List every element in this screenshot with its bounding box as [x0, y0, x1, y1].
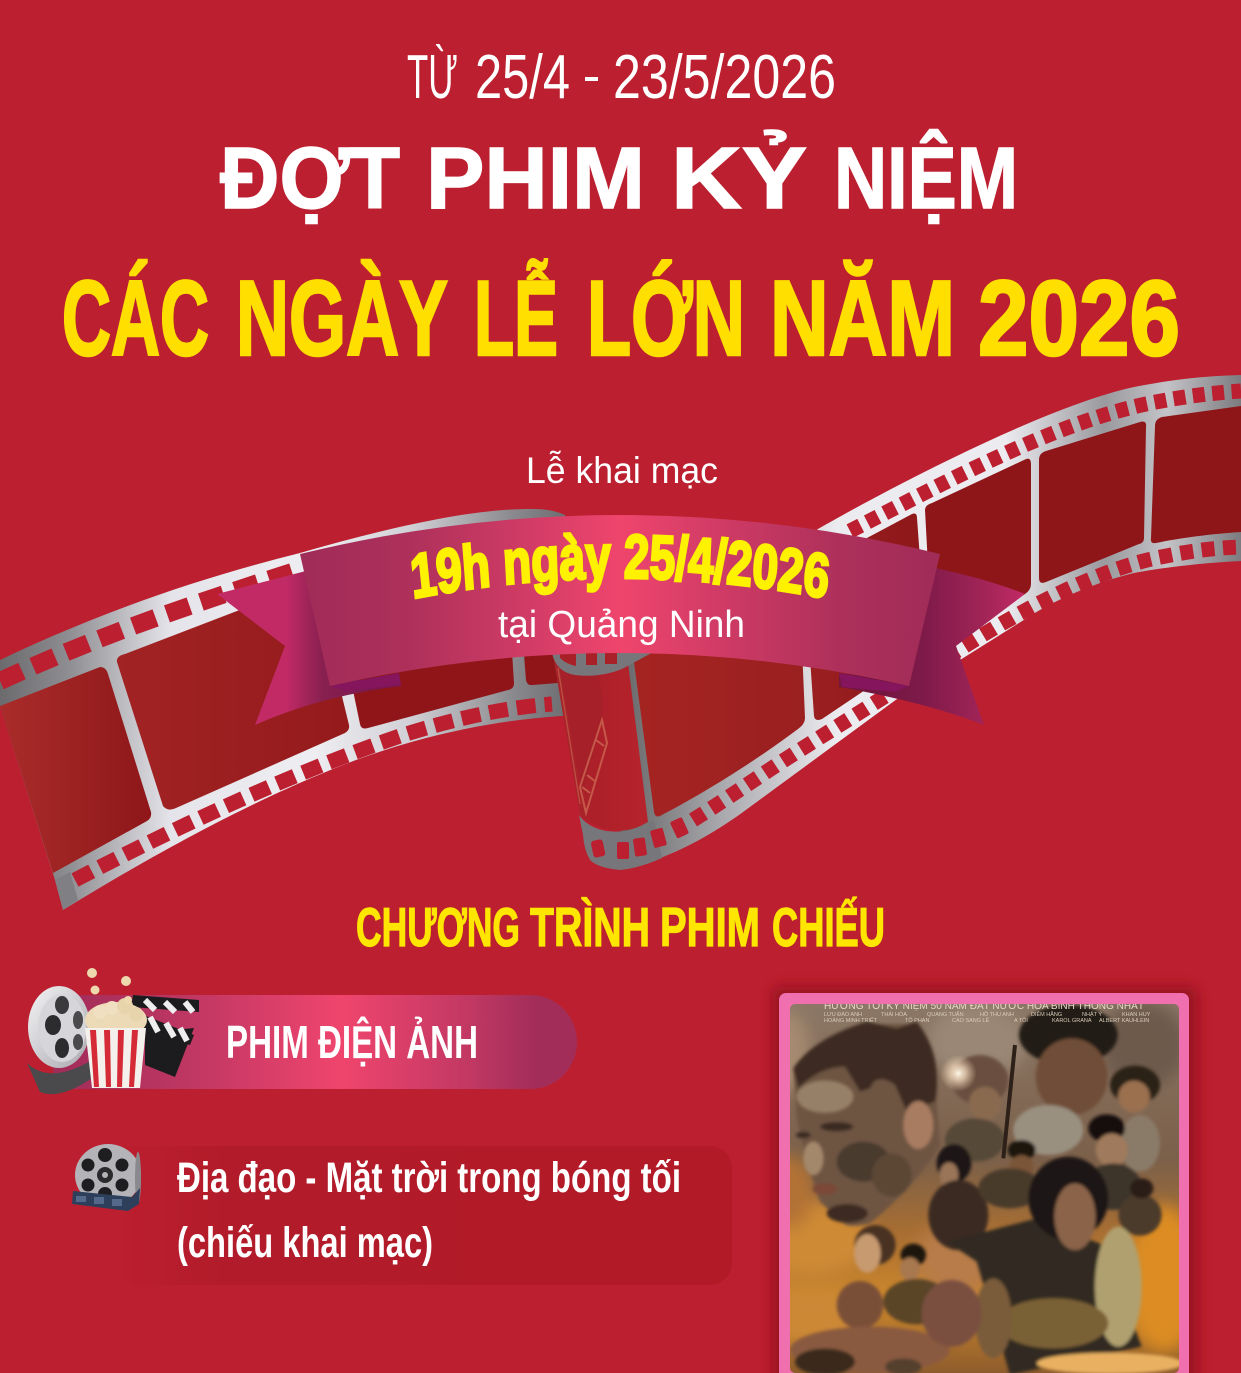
poster cast names: NHẬT Ý	[1082, 1011, 1102, 1018]
icon: film tail	[27, 1060, 92, 1094]
poster cast names: TÔ PHAN	[905, 1017, 929, 1024]
title: date range	[407, 43, 836, 112]
title: yellow heading: CÁC	[62, 258, 209, 378]
poster cast names: ALBERT KAUHLEIN	[1099, 1018, 1149, 1024]
poster cast names: DIỄM HẰNG	[1031, 1010, 1062, 1018]
title: yellow heading: LỚN	[587, 258, 745, 378]
poster cast names: LƯU ĐÀO ANH	[824, 1011, 862, 1018]
poster cast names: HOÀNG MINH TRIẾT	[824, 1017, 878, 1024]
ribbon banner	[217, 515, 1025, 725]
icon: popcorn bucket	[85, 1028, 146, 1088]
section heading: film programme	[356, 896, 885, 958]
opening ceremony label: Lễ khai mạc	[526, 450, 718, 491]
section heading: film programme: TRÌNH	[530, 896, 650, 958]
curl: inner fold	[560, 668, 602, 795]
opening venue: tại Quảng Ninh	[498, 604, 745, 646]
poster cast names: A TÔI	[1014, 1017, 1028, 1024]
title: yellow heading: 2026	[978, 258, 1180, 378]
icon: cinema reel, popcorn and clapperboard	[27, 968, 199, 1094]
title: yellow heading: NĂM	[770, 258, 955, 378]
title: date range: 23/5/2026	[613, 43, 836, 112]
film title: Địa đạo - Mặt trời trong bóng tối	[177, 1154, 681, 1202]
poster cast names	[824, 1011, 1150, 1022]
title: yellow heading	[62, 258, 1180, 378]
title: date range: 25/4	[475, 43, 570, 112]
poster cast names: THÁI HÒA	[881, 1011, 907, 1018]
poster shadow	[773, 987, 1197, 1373]
film strip: central curl	[552, 650, 689, 870]
title: main heading	[220, 129, 1018, 227]
film strip illustration	[0, 375, 1241, 910]
film strip: right section	[620, 375, 1241, 870]
pill background	[53, 995, 577, 1089]
poster cast names: KHAN HUY	[1122, 1012, 1151, 1018]
section heading: film programme: CHIẾU	[772, 896, 885, 958]
icon: popcorn	[85, 968, 147, 1038]
title: main heading: KỶ	[671, 129, 807, 227]
title: date range: TỪ	[407, 43, 458, 112]
section heading: film programme: PHIM	[660, 896, 760, 958]
poster cast names: QUANG TUẤN	[927, 1011, 964, 1018]
film note: (chiếu khai mạc)	[177, 1219, 433, 1267]
curl: body	[553, 655, 648, 831]
pill label: PHIM ĐIỆN ẢNH	[226, 1016, 478, 1068]
icon: small film reel	[72, 1144, 141, 1211]
title: yellow heading: LỄ	[474, 258, 558, 378]
opening date: 19h ngày 25/4/2026	[411, 532, 830, 600]
row background	[34, 1146, 732, 1285]
icon: film reel	[28, 986, 90, 1068]
poster cast names: KAROL GRANA	[1052, 1018, 1092, 1024]
curl: diamond pattern	[580, 720, 607, 813]
ribbon: left tail	[217, 560, 401, 725]
poster artwork	[790, 1004, 1179, 1373]
poster cast names: HỒ THU ANH	[980, 1011, 1014, 1018]
film strip: left section	[0, 509, 570, 910]
poster cast names: CAO SANG LÊ	[952, 1016, 990, 1024]
section heading: film programme: CHƯƠNG	[356, 896, 520, 958]
title: main heading: ĐỢT	[220, 130, 400, 227]
title: yellow heading: NGÀY	[236, 258, 448, 378]
title: main heading: NIỆM	[834, 130, 1018, 227]
category pill: feature films	[53, 995, 577, 1089]
ribbon: main band	[300, 515, 940, 686]
ribbon: right tail	[839, 566, 1025, 725]
film poster	[747, 987, 1200, 1373]
title: main heading: PHIM	[426, 130, 645, 227]
curl: bottom rim	[579, 815, 662, 870]
ribbon: fold shadows	[330, 673, 909, 692]
film list row	[34, 1144, 732, 1285]
poster tagline: HƯỚNG TỚI KỶ NIỆM 50 NĂM ĐẤT NƯỚC HÒA BÌNH THỐNG NHẤT	[824, 998, 1145, 1012]
icon: clapperboard	[131, 995, 199, 1077]
curl: top rim	[552, 650, 657, 676]
poster frame	[779, 993, 1189, 1373]
